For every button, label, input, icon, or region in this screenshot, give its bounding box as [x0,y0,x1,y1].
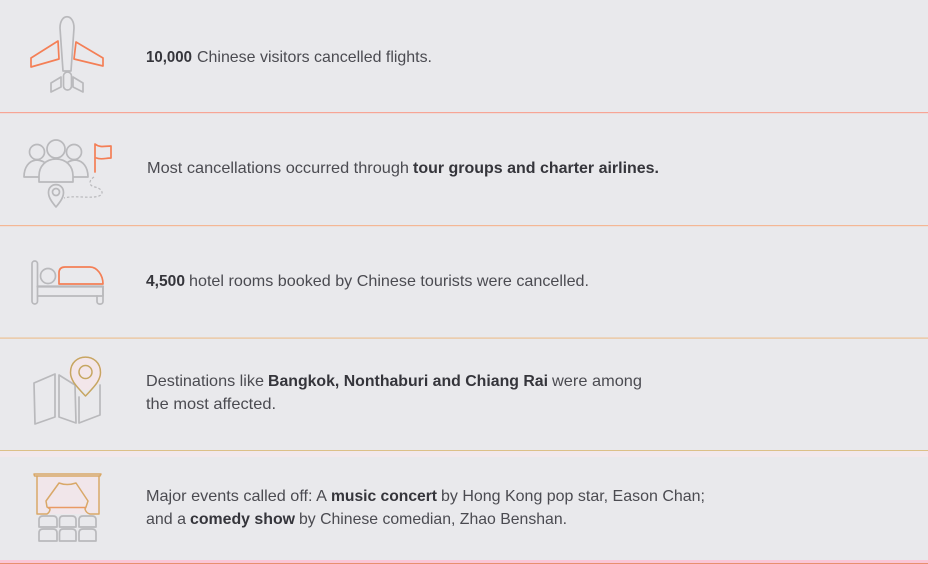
text: visitors cancelled flights: 10,000 [146,49,192,66]
text: destinations affected: Bangkok, Nonthaburi and Chiang Rai [268,373,548,390]
text: visitors cancelled flights: Chinese visitors cancelled flights. [197,49,432,66]
text: major events called off [146,488,705,528]
text: major events called off: by Hong Kong pop star, Eason Chan; [441,488,705,505]
icon: airplane [31,17,103,92]
text: major events called off: and a [146,511,186,528]
text: tour groups and charter airlines: Most cancellations occurred through [147,160,409,177]
icon: stage and seats [34,474,101,541]
text: destinations affected: were among [551,373,642,390]
text: destinations affected [146,373,642,413]
text: destinations affected: Destinations like [146,373,264,390]
text: destinations affected: the most affected. [146,396,276,413]
text: tour groups and charter airlines: tour groups and charter airlines. [413,160,659,177]
text: hotel rooms cancelled: 4,500 [146,273,185,290]
text: tour groups and charter airlines [147,160,659,177]
icon: hotel bed [32,261,103,304]
icon: tour group with flag and route [24,140,111,207]
text: hotel rooms cancelled: hotel rooms booked by Chinese tourists were cancelled. [189,273,589,290]
text: major events called off: comedy show [190,511,296,528]
text: major events called off: music concert [331,488,438,505]
icon: map with pin [34,356,102,424]
text: major events called off: Major events called off: A [146,488,327,505]
text: major events called off: by Chinese comedian, Zhao Benshan. [299,511,567,528]
